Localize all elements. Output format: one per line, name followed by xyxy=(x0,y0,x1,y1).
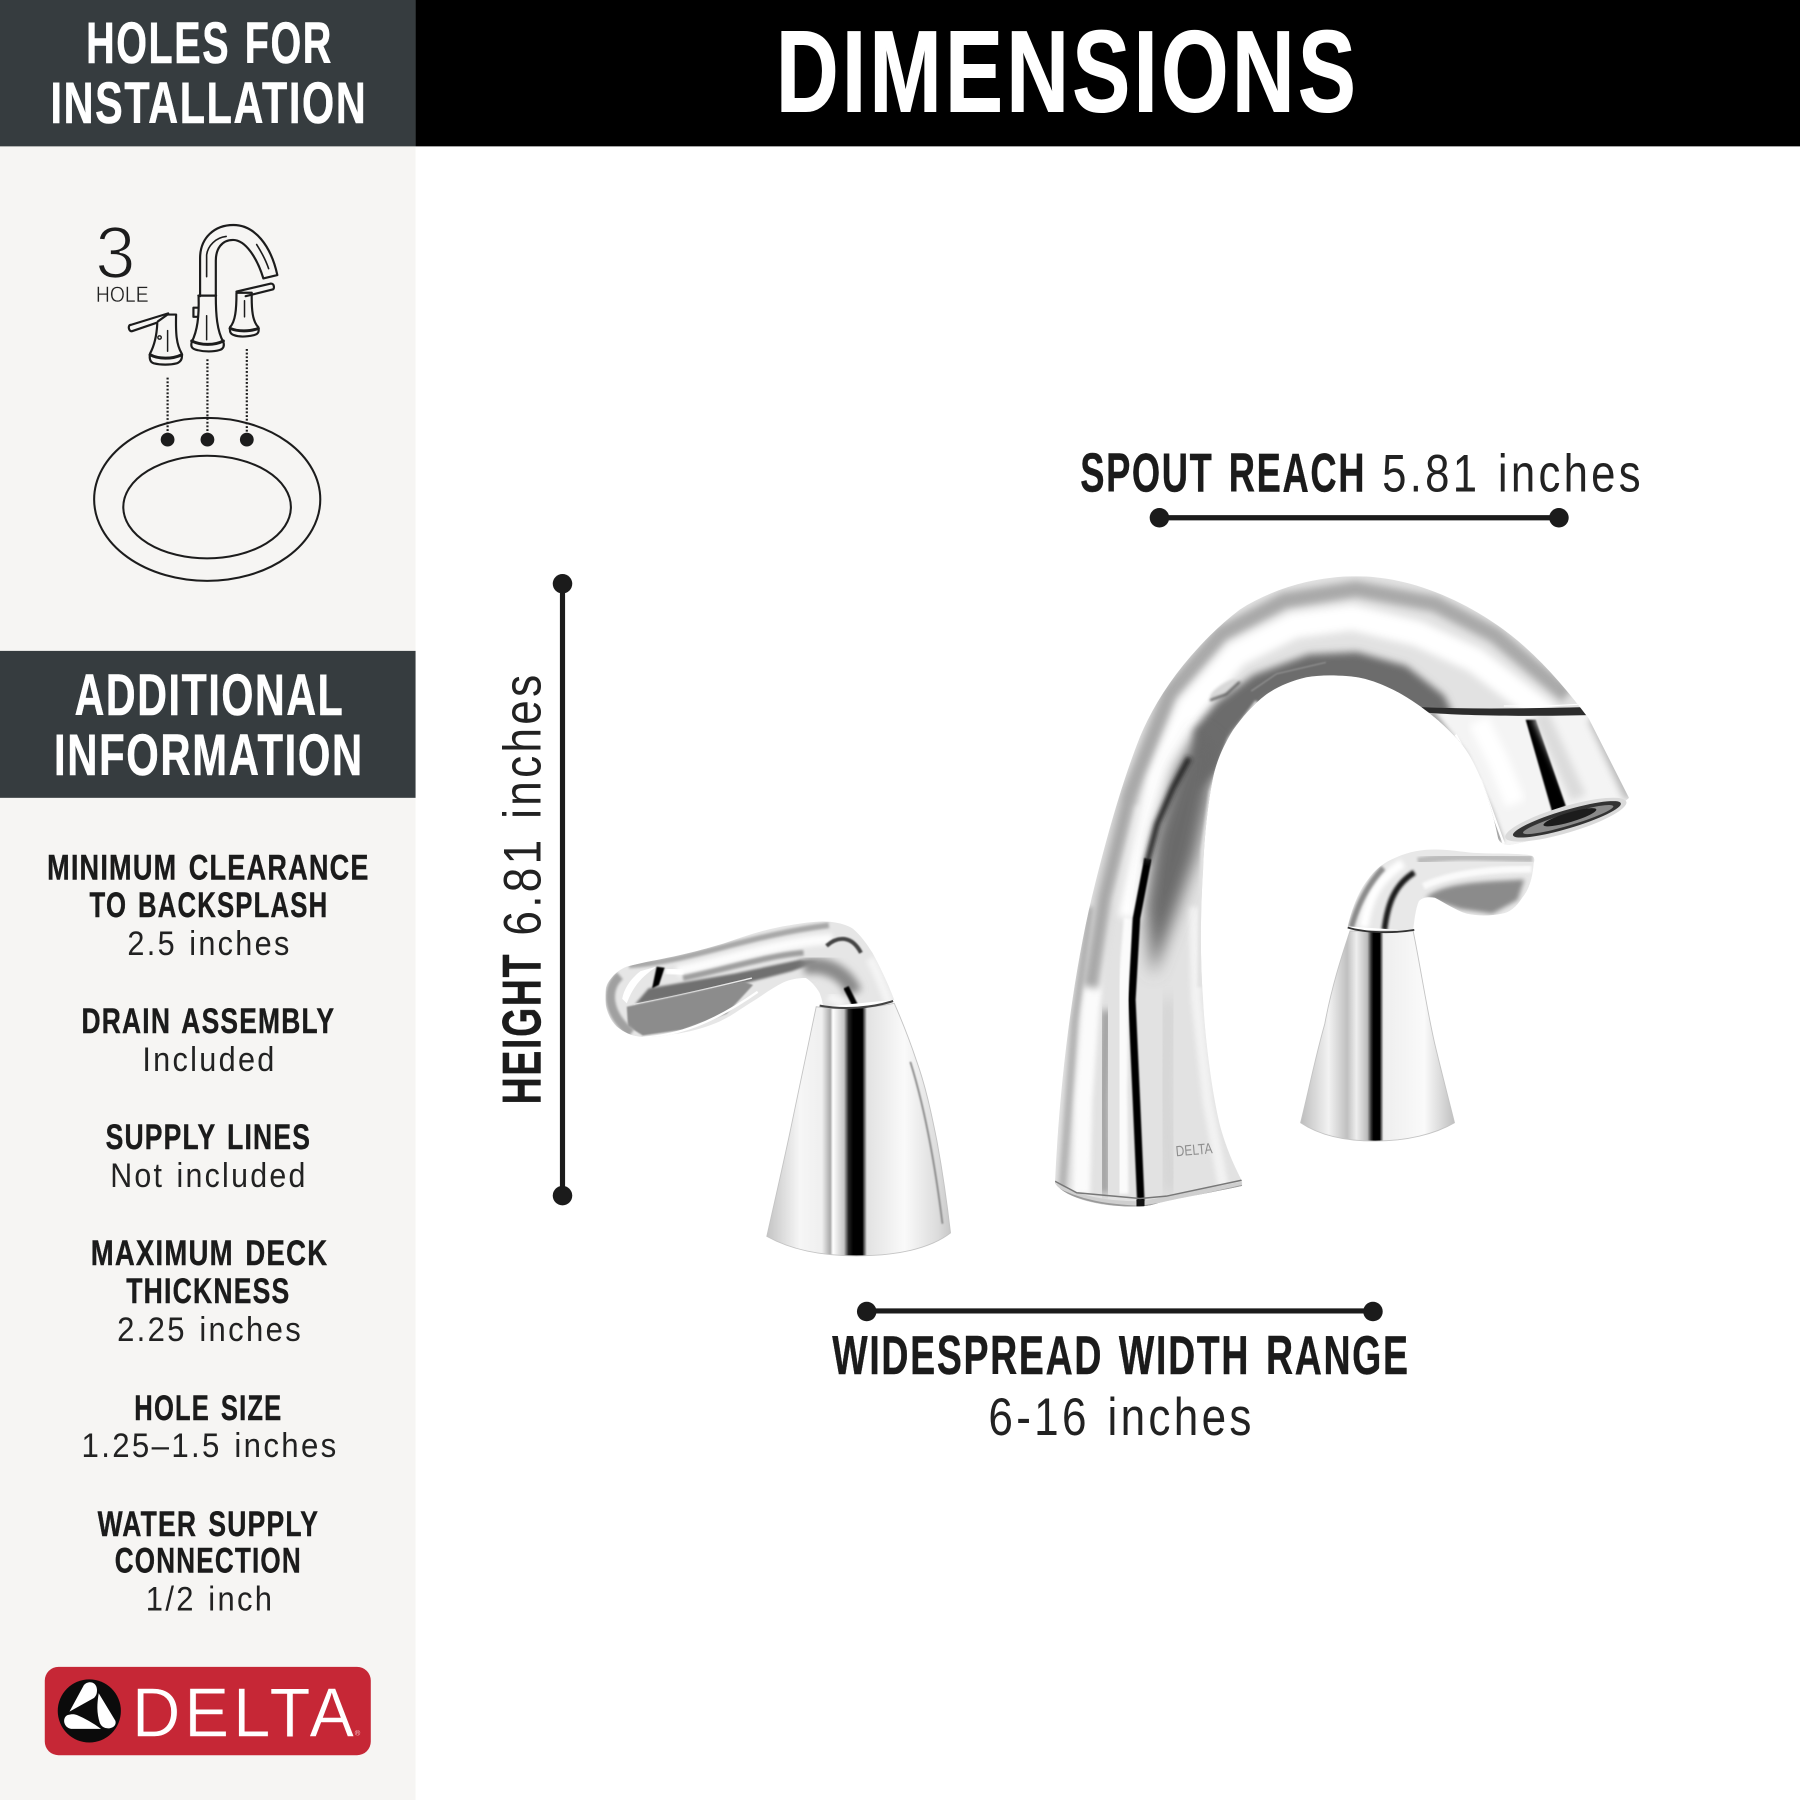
faucet: right handle xyxy=(1301,849,1534,1141)
dimension: height xyxy=(491,574,572,1205)
outer grey band xyxy=(1091,589,1567,987)
dotted alignment lines xyxy=(168,349,247,440)
spec: maximum deck thickness: MAXIMUM DECK xyxy=(91,1234,328,1273)
spec: water supply connection: 1/2 inch xyxy=(146,1581,274,1619)
title: dimensions banner xyxy=(416,0,1800,146)
dimension: widespread width range: 6-16 inches xyxy=(988,1388,1255,1447)
faucet: main spout xyxy=(1033,562,1642,1217)
hole count label: 3 xyxy=(95,211,135,294)
right handle base xyxy=(1301,931,1454,1141)
dark inner band, arc xyxy=(1194,652,1462,792)
white arc highlight xyxy=(1131,618,1550,918)
dimension: widespread width range: WIDESPREAD WIDTH RANGE xyxy=(832,1324,1410,1386)
spec: water supply connection: CONNECTION xyxy=(115,1542,302,1581)
lower stem reflections xyxy=(1062,907,1091,1194)
faucet engraved logo: DELTA xyxy=(1175,1140,1213,1160)
spec: maximum deck thickness: THICKNESS xyxy=(126,1272,290,1311)
aerator xyxy=(1502,789,1630,850)
faucet: left handle xyxy=(605,922,951,1256)
spec: minimum clearance xyxy=(47,848,370,963)
sink basin xyxy=(94,418,320,581)
spec: supply lines: Not included xyxy=(110,1157,308,1195)
heading: additional information: INFORMATION xyxy=(54,723,364,788)
heading: holes for installation: HOLES FOR xyxy=(86,11,333,76)
icon: three hole sink diagram xyxy=(94,211,320,581)
spec: minimum clearance: 2.5 inches xyxy=(127,925,292,963)
spec: hole size: 1.25–1.5 inches xyxy=(82,1427,339,1465)
heading: additional information xyxy=(0,651,416,798)
base rim xyxy=(1055,1186,1242,1205)
dimension: spout reach: 5.81 inches xyxy=(1382,444,1644,503)
title: dimensions banner: DIMENSIONS xyxy=(776,6,1359,136)
dimension: spout reach: SPOUT REACH xyxy=(1080,441,1366,503)
left handle base xyxy=(767,1003,951,1256)
heading: holes for installation xyxy=(0,0,416,146)
spec: supply lines: SUPPLY LINES xyxy=(106,1118,311,1157)
inner edge light strip xyxy=(1201,703,1258,987)
spec: minimum clearance: MINIMUM CLEARANCE xyxy=(47,848,370,887)
logo: delta xyxy=(45,1667,371,1755)
right handle lever xyxy=(1348,849,1534,931)
spec: drain assembly: DRAIN ASSEMBLY xyxy=(82,1002,335,1041)
spec: maximum deck thickness xyxy=(91,1234,328,1349)
nozzle sprayer head xyxy=(1424,708,1629,844)
logo: delta: DELTA xyxy=(132,1674,358,1752)
heading: additional information: ADDITIONAL xyxy=(75,663,344,728)
highlight blob xyxy=(1210,680,1236,698)
dimension: height: 6.81 inches xyxy=(494,672,553,936)
dimension: widespread width range xyxy=(832,1302,1410,1447)
spec: supply lines xyxy=(106,1118,311,1195)
heading: holes for installation: INSTALLATION xyxy=(51,71,367,136)
spec: minimum clearance: TO BACKSPLASH xyxy=(90,886,328,925)
panel: left sidebar xyxy=(0,0,416,1800)
black streak xyxy=(1132,859,1148,1208)
hole count label: HOLE xyxy=(96,282,149,307)
spec: water supply connection xyxy=(98,1505,319,1619)
dark inner band, flank xyxy=(1146,730,1219,976)
black band xyxy=(1420,707,1589,716)
spec: hole size: HOLE SIZE xyxy=(134,1389,282,1428)
spec: hole size xyxy=(82,1389,339,1465)
spec: drain assembly: Included xyxy=(142,1041,277,1079)
spec: maximum deck thickness: 2.25 inches xyxy=(117,1311,303,1349)
dimension: spout reach xyxy=(1080,441,1644,527)
spec: drain assembly xyxy=(82,1002,335,1079)
mounting holes xyxy=(161,433,254,447)
dimension: height: HEIGHT xyxy=(491,953,553,1104)
left handle lever xyxy=(605,922,894,1038)
logo: delta: ® xyxy=(355,1729,361,1738)
hole count label xyxy=(95,211,149,307)
spec: water supply connection: WATER SUPPLY xyxy=(98,1505,319,1544)
icon: spout line drawing xyxy=(129,225,277,365)
